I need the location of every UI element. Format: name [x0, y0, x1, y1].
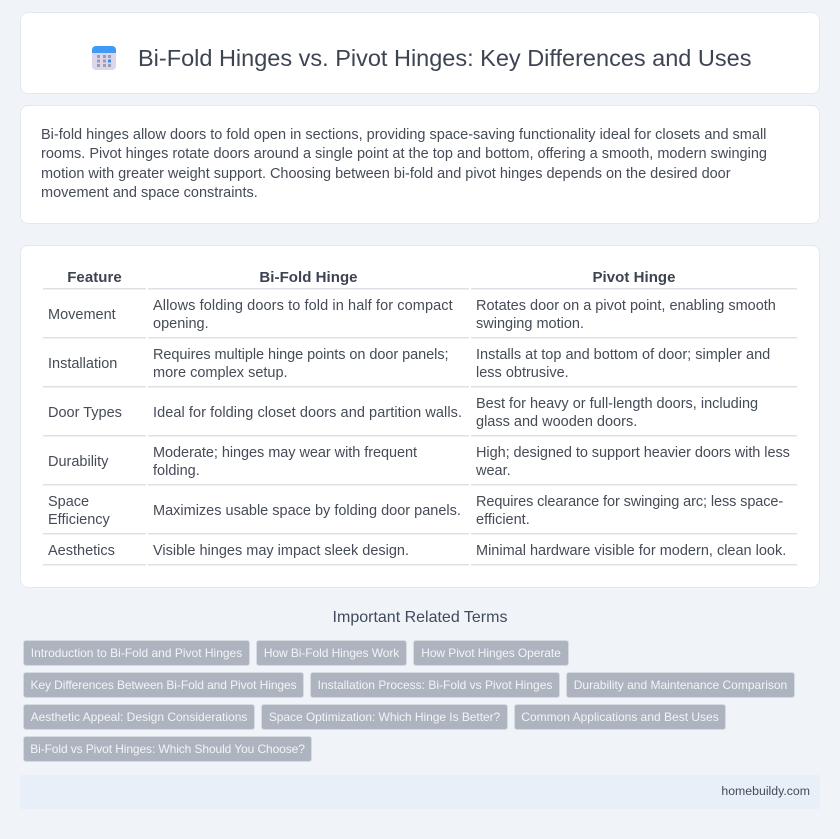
row: durability: Durability [48, 454, 108, 470]
row: installation: less obtrusive. [476, 365, 569, 381]
row: movement: Movement [48, 307, 116, 323]
table headers [67, 269, 676, 286]
row: durability: folding. [153, 463, 200, 479]
intro text: movement and space constraints. [41, 185, 258, 201]
row: durability: wear. [476, 463, 511, 479]
row: movement: Allows folding doors to fold in half for compact [153, 298, 453, 314]
related term tags: How Bi-Fold Hinges Work [264, 646, 399, 660]
row: space efficiency: Space [48, 494, 89, 510]
related term tags: Durability and Maintenance Comparison [574, 678, 787, 692]
row: durability: Moderate; hinges may wear with frequent [153, 445, 417, 461]
row: space efficiency: Requires clearance for swinging arc; less space- [476, 494, 783, 510]
row: installation [48, 347, 770, 381]
related term tags: Bi-Fold vs Pivot Hinges: Which Should You Choose? [30, 742, 305, 756]
row: movement: Rotates door on a pivot point, enabling smooth [476, 298, 776, 314]
panel: comparison table [20, 245, 820, 588]
row: door types: Ideal for folding closet doors and partition walls. [153, 405, 462, 421]
table rules [43, 288, 797, 566]
footer credit: homebuildy.com [721, 784, 810, 798]
intro text [41, 127, 767, 201]
row: installation: Requires multiple hinge points on door panels; [153, 347, 448, 363]
title: Bi-Fold Hinges vs. Pivot Hinges: Key Differences and Uses [138, 45, 751, 71]
table headers: Pivot Hinge [592, 269, 676, 286]
row: door types [48, 396, 758, 430]
row: installation: Installs at top and bottom of door; simpler and [476, 347, 770, 363]
row: installation: Installation [48, 356, 117, 372]
row: installation: more complex setup. [153, 365, 288, 381]
row: movement: opening. [153, 316, 209, 332]
table headers: Feature [67, 269, 122, 286]
row: aesthetics: Aesthetics [48, 543, 115, 559]
row: door types: glass and wooden doors. [476, 414, 637, 430]
panel: introduction [20, 105, 820, 224]
row: space efficiency: Maximizes usable space by folding door panels. [153, 503, 461, 519]
row: door types: Door Types [48, 405, 122, 421]
row: aesthetics: Minimal hardware visible for modern, clean look. [476, 543, 786, 559]
related term tags: Installation Process: Bi-Fold vs Pivot Hinges [318, 678, 552, 692]
row: aesthetics [48, 543, 786, 559]
row: durability: High; designed to support heavier doors with less [476, 445, 790, 461]
row: space efficiency [48, 494, 783, 528]
row: aesthetics: Visible hinges may impact sleek design. [153, 543, 409, 559]
related term tags: Aesthetic Appeal: Design Considerations [31, 710, 247, 724]
row: durability [48, 445, 790, 479]
intro text: rooms. Pivot hinges rotate doors around a single point at the top and bottom, offering a smooth, modern swinging [41, 146, 767, 162]
heading: important related terms: Important Related Terms [333, 609, 507, 626]
row: space efficiency: Efficiency [48, 512, 110, 528]
related term tags: Common Applications and Best Uses [521, 710, 719, 724]
footer bar [20, 775, 820, 809]
related term tags [23, 640, 795, 762]
row: space efficiency: efficient. [476, 512, 530, 528]
row: door types: Best for heavy or full-length doors, including [476, 396, 758, 412]
related term tags: How Pivot Hinges Operate [421, 646, 561, 660]
intro text: Bi-fold hinges allow doors to fold open in sections, providing space-saving functionality ideal for closets and small [41, 127, 766, 143]
header card [20, 12, 820, 94]
table headers: Bi-Fold Hinge [259, 269, 358, 286]
related term tags: Key Differences Between Bi-Fold and Pivot Hinges [30, 678, 297, 692]
icon: calendar grid [92, 46, 116, 70]
related term tags: Space Optimization: Which Hinge Is Better? [269, 710, 500, 724]
row: movement: swinging motion. [476, 316, 584, 332]
intro text: motion with greater weight support. Choosing between bi-fold and pivot hinges depends on the desired door [41, 166, 731, 182]
row: movement [48, 298, 776, 332]
related term tags: Introduction to Bi-Fold and Pivot Hinges [31, 646, 242, 660]
